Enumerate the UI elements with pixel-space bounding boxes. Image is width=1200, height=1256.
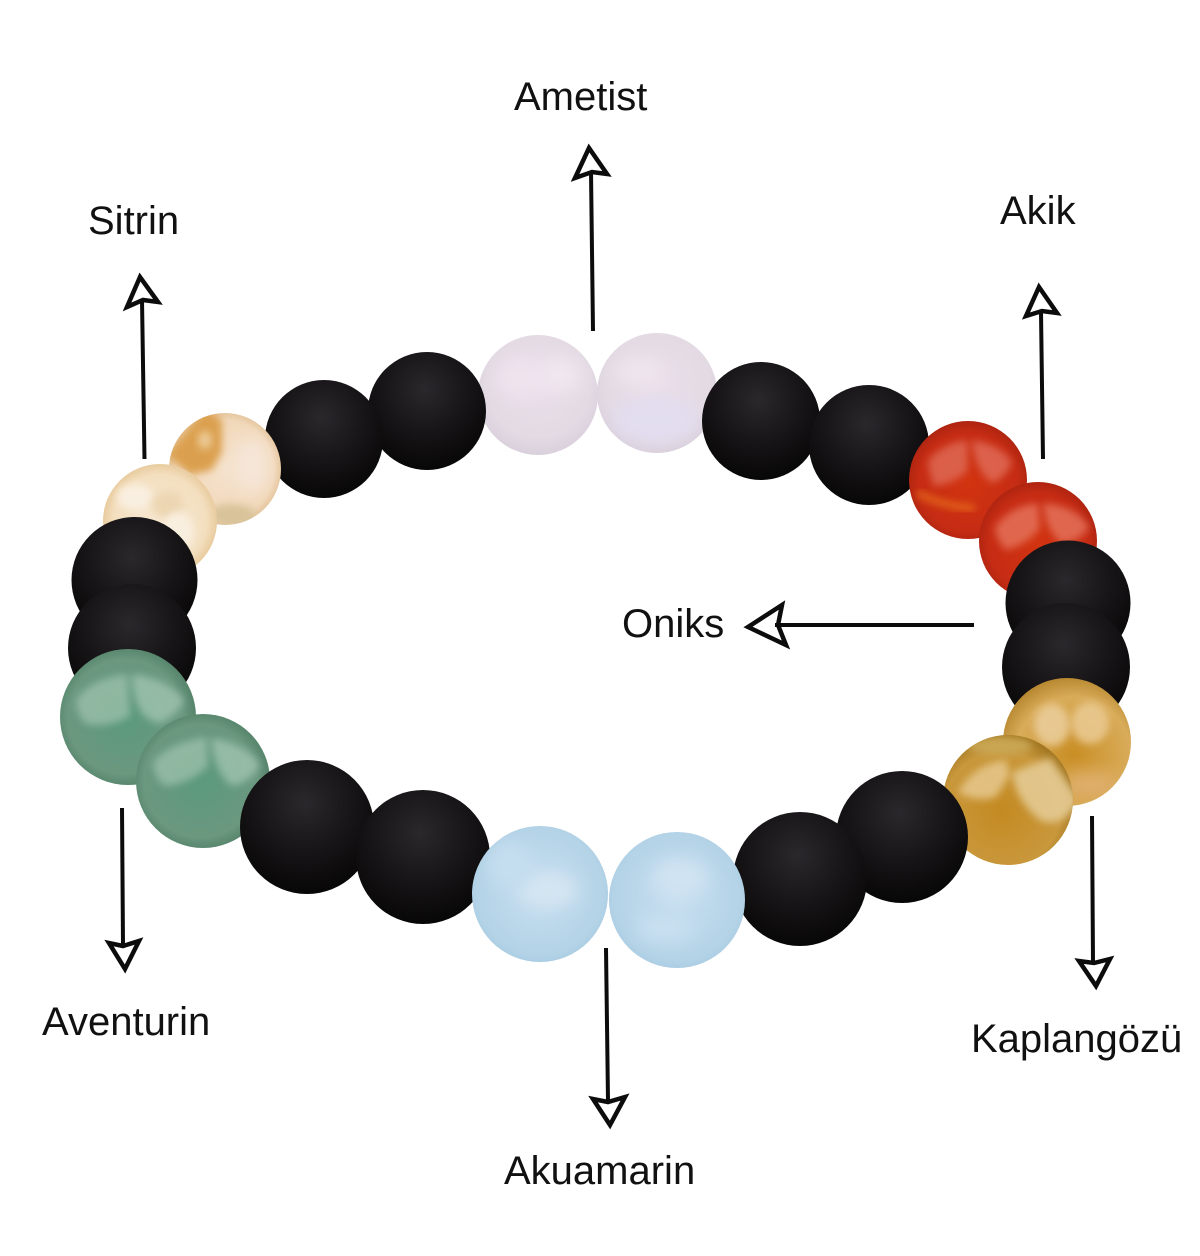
label: Aventurin: Aventurin: [42, 1000, 210, 1044]
label: Ametist: Ametist: [514, 75, 647, 119]
arrow: Ametist: [575, 148, 607, 331]
beads: aquamarine: [472, 826, 745, 968]
beads: onyx upper right: [702, 362, 929, 505]
beads: aventurine: [60, 649, 270, 848]
label: Akik: Akik: [1000, 189, 1077, 233]
beads: tiger eye: [943, 678, 1131, 865]
arrow: Kaplangözü: [1079, 816, 1110, 986]
beads: carnelian: [909, 421, 1097, 600]
arrow: Akuamarin: [593, 948, 625, 1125]
label: Kaplangözü: Kaplangözü: [971, 1017, 1182, 1061]
beads: citrine: [103, 413, 281, 566]
label: Sitrin: Sitrin: [88, 199, 179, 243]
arrow: Aventurin: [109, 808, 139, 969]
beads: onyx lower right: [733, 771, 968, 946]
beads: onyx upper left: [265, 352, 486, 498]
beads: onyx left: [68, 517, 198, 712]
beads: amethyst: [478, 333, 717, 455]
beads: onyx lower left: [240, 760, 490, 924]
label: Akuamarin: Akuamarin: [504, 1149, 695, 1193]
label: Oniks: Oniks: [622, 602, 724, 646]
arrow: Oniks: [748, 605, 974, 645]
arrow: Akik: [1026, 287, 1057, 459]
arrow: Sitrin: [127, 277, 158, 459]
beads: onyx right: [1002, 540, 1130, 731]
